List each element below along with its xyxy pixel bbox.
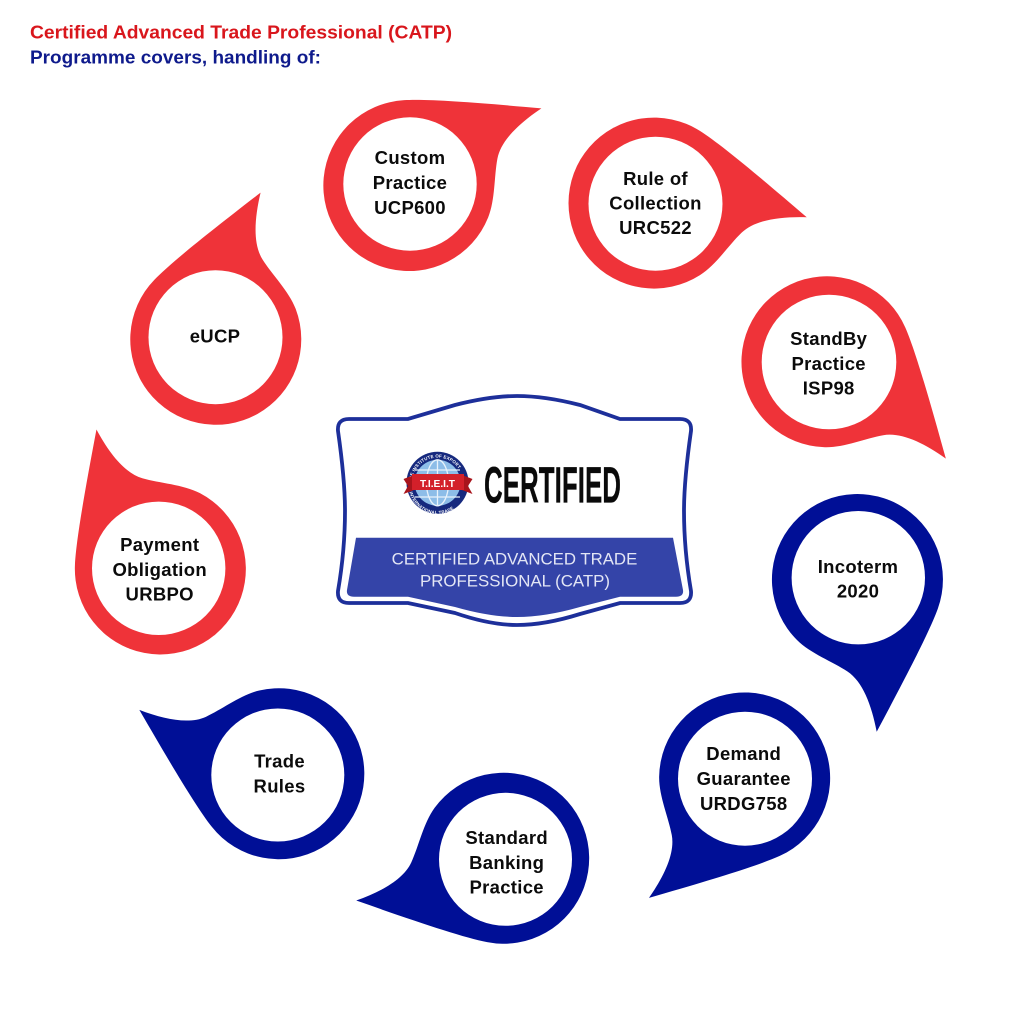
pin: eUCP (103, 165, 356, 452)
pin: Demand Guarantee URDG758: Demand (706, 743, 781, 764)
pin: StandBy Practice ISP98: StandBy (790, 328, 868, 349)
pin: Custom Practice UCP600 (297, 47, 582, 298)
pin: Payment Obligation URBPO (33, 398, 268, 676)
pin: Demand Guarantee URDG758 (576, 657, 866, 945)
pin: StandBy Practice ISP98 (706, 241, 994, 531)
badge outline (338, 396, 691, 625)
logo: T.I.E.I.T globe seal: THE INSTITUTE OF EXPORT (410, 454, 462, 476)
pin: Standard Banking Practice: Standard (465, 827, 548, 848)
logo: T.I.E.I.T globe seal: T.I.E.I.T (420, 478, 456, 490)
badge: certified (336, 394, 693, 627)
certified wordmark: CERTIFIED (484, 456, 621, 514)
title: Certified Advanced Trade Professional (CATP) (30, 22, 452, 42)
pin: Payment Obligation URBPO: Obligation (112, 559, 207, 580)
pin: Demand Guarantee URDG758: URDG758 (700, 793, 787, 814)
title (30, 22, 452, 68)
pin: Custom Practice UCP600: UCP600 (374, 197, 446, 218)
banner text: PROFESSIONAL (CATP) (420, 572, 610, 591)
pin: Incoterm 2020: Incoterm (818, 556, 898, 577)
pin: eUCP: eUCP (190, 325, 240, 346)
badge banner (347, 538, 683, 617)
pin: Incoterm 2020 (772, 494, 943, 732)
pin: StandBy Practice ISP98: Practice (791, 353, 866, 374)
pin: Trade Rules (104, 621, 397, 891)
pin: Trade Rules: Trade (254, 750, 305, 772)
logo: T.I.E.I.T globe seal: INTERNATIONAL TRADE (410, 492, 454, 514)
pin: Standard Banking Practice: Practice (469, 876, 544, 898)
pin: Standard Banking Practice (340, 761, 601, 966)
pin: Trade Rules: Rules (254, 776, 305, 796)
pin: StandBy Practice ISP98: ISP98 (803, 378, 855, 398)
pin: Payment Obligation URBPO: URBPO (126, 584, 194, 605)
pin: Rule of Collection URC522: Collection (609, 192, 702, 214)
pin: Incoterm 2020: 2020 (837, 581, 879, 602)
pin: Standard Banking Practice: Banking (469, 852, 544, 873)
banner text (392, 549, 637, 591)
pin: Payment Obligation URBPO: Payment (120, 534, 199, 555)
title: Programme covers, handling of: (30, 46, 321, 68)
pin: Rule of Collection URC522: Rule of (623, 168, 688, 189)
logo: T.I.E.I.T globe seal (404, 452, 472, 514)
pin: Rule of Collection URC522 (552, 101, 821, 319)
pin: Demand Guarantee URDG758: Guarantee (697, 768, 791, 789)
banner text: CERTIFIED ADVANCED TRADE (392, 549, 637, 568)
pin: Rule of Collection URC522: URC522 (619, 217, 692, 238)
pin: Custom Practice UCP600: Custom (375, 147, 445, 168)
pin: Custom Practice UCP600: Practice (373, 172, 447, 193)
